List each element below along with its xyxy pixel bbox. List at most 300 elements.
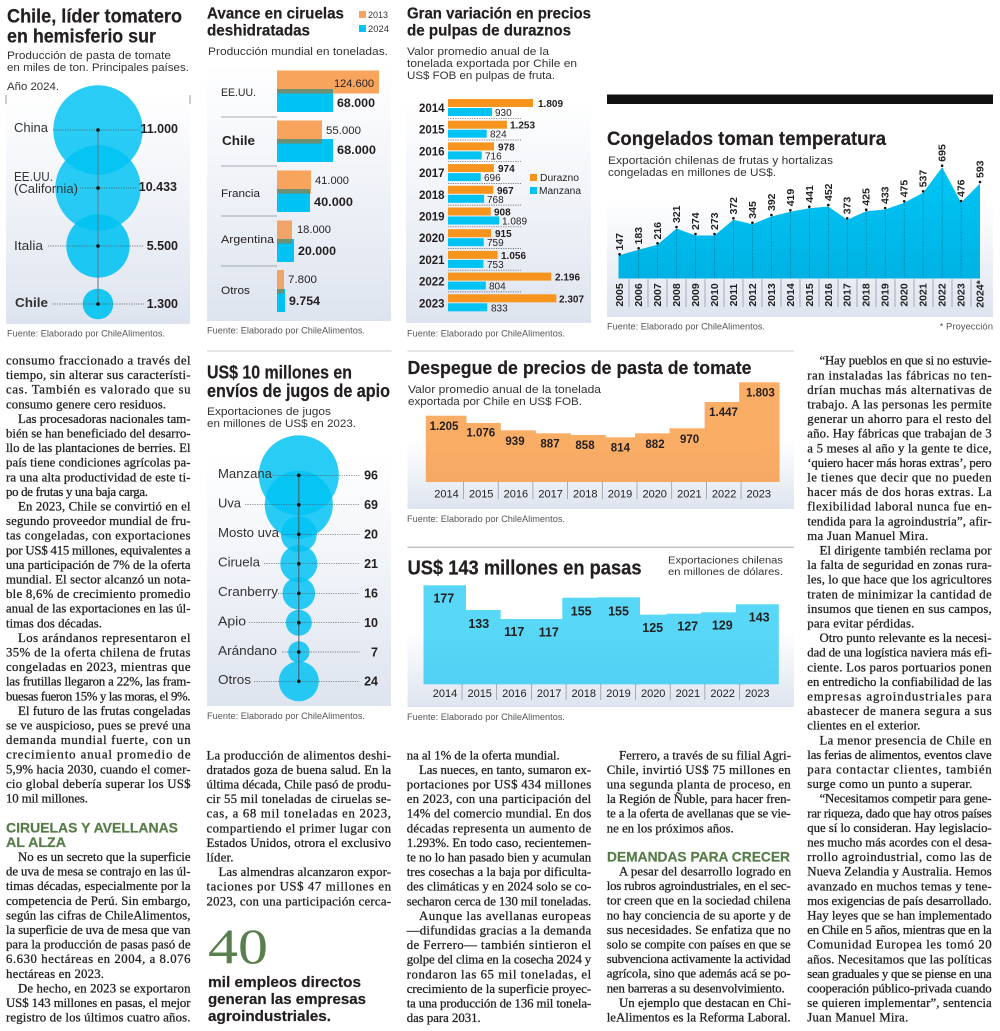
- bar chart: 939: [505, 436, 525, 448]
- bubble chart: Manzana: [218, 467, 272, 481]
- year axis: 2014: [785, 283, 797, 307]
- article column 3: das para 2031.: [407, 1011, 481, 1025]
- title: Avance en ciruelas: [207, 6, 344, 22]
- article column 5: en entredicho la confiabilidad de las: [807, 675, 992, 689]
- subtitle: US$ FOB en pulpas de fruta.: [407, 70, 555, 82]
- article column 1 bottom: de uva de mesa se contrajo en las úl-: [6, 865, 190, 879]
- article column 1 top: Los arándanos representaron el: [18, 631, 191, 645]
- article column 2: líder.: [206, 850, 234, 864]
- bubble chart: Chile: [15, 296, 48, 310]
- article column 5: años. Necesitamos que las políticas: [807, 952, 992, 966]
- bar chart: 2023: [419, 298, 445, 310]
- title: Gran variación en precios: [407, 6, 591, 22]
- header bar: [607, 94, 993, 104]
- article column 5: sean graduales y que se piense en una: [807, 967, 992, 981]
- article column 5: empresas agroindustriales para: [807, 690, 992, 704]
- bubble chart: 11.000: [140, 122, 178, 136]
- bubble chart: 10.433: [139, 180, 177, 194]
- subtitle: en millones de dólares.: [668, 567, 783, 578]
- legend: Durazno: [540, 173, 579, 184]
- article column 3: tres cosechas a la baja por dificulta-: [407, 865, 591, 879]
- article column 2: Estados Unidos, otrora el exclusivo: [206, 836, 391, 850]
- bubble chart: 5.500: [147, 239, 178, 253]
- area chart: 537: [918, 170, 930, 187]
- bar chart: 117: [539, 626, 559, 640]
- year axis: 2016: [823, 283, 835, 307]
- article column 1 top: una participación de 7% de la oferta: [6, 558, 191, 572]
- year axis: 2013: [766, 283, 778, 307]
- subtitle: [207, 406, 356, 430]
- bar chart: 858: [575, 440, 595, 452]
- bar chart: 1.089: [502, 216, 527, 228]
- article column 5: tendida para la agroindustria”, afir-: [807, 514, 992, 528]
- article column 1 top: El futuro de las frutas congeladas: [18, 704, 191, 718]
- bar chart: 753: [487, 260, 504, 271]
- article column 5: las ferias de alimentos, eventos clave: [807, 748, 992, 762]
- article column 4 top: te a la oferta de avellanas que se vie-: [607, 807, 791, 821]
- bubble chart: 20: [364, 528, 378, 542]
- year axis: 2011: [728, 283, 740, 306]
- bar chart: 127: [677, 620, 698, 634]
- year axis: [614, 279, 986, 308]
- bar chart: 2016: [504, 488, 528, 500]
- title: [207, 6, 344, 40]
- panel background: [408, 630, 794, 707]
- title: US$ 143 millones en pasas: [408, 558, 642, 580]
- article column 4 top: [607, 748, 791, 835]
- article column 1 top: crecimiento anual promedio de: [6, 748, 191, 762]
- area chart: 476: [956, 179, 968, 197]
- article column 2: dratados goza de buena salud. En la: [206, 763, 391, 777]
- article column 1 top: consumo fraccionado a través del: [6, 354, 191, 368]
- bar chart: 2014: [433, 688, 457, 700]
- bar chart: 915: [495, 229, 512, 240]
- article column 1 bottom: para la producción de pasas pasó de: [6, 938, 191, 952]
- bar chart: 55.000: [326, 125, 361, 137]
- bar chart: 1.205: [430, 421, 459, 433]
- bubble chart: 24: [364, 674, 378, 688]
- year axis: 2012: [747, 283, 759, 307]
- article column 5: ciente. Los paros portuarios ponen: [807, 660, 992, 674]
- bar chart: 68.000: [337, 98, 375, 110]
- bar chart: 908: [494, 208, 511, 218]
- subtitle: en miles de ton. Principales países.: [7, 62, 189, 74]
- article column 1 bottom: No es un secreto que la superficie: [18, 850, 191, 864]
- subtitle: [408, 384, 602, 408]
- article column 1 bottom: registro de los últimos cuatro años.: [6, 1011, 190, 1025]
- area chart: 419: [785, 189, 797, 206]
- area chart: 433: [880, 186, 892, 204]
- article column 5: nes mucho más acordes con el desa-: [807, 836, 992, 850]
- panel background: [207, 455, 391, 706]
- bar chart: 1.447: [709, 407, 738, 419]
- article column 5: rrollo agroindustrial, como las de: [807, 850, 992, 864]
- article column 5: a 5 meses al año y la gente te dice,: [807, 441, 992, 455]
- bar chart: 125: [642, 621, 663, 635]
- article column 4 bottom: A pesar del desarrollo logrado en: [619, 864, 792, 878]
- bar chart: 155: [571, 604, 592, 618]
- bubble chart: (California): [14, 182, 78, 196]
- panel: raisins: [407, 556, 794, 723]
- bar chart: 1.056: [501, 251, 526, 262]
- article column 1 bottom: 6.630 hectáreas en 2004, a 8.076: [6, 952, 191, 966]
- bar chart: 2022: [710, 688, 735, 700]
- article column 5: Hay leyes que se han implementado: [807, 908, 992, 922]
- article column 5: hacer más de dos horas extras. La: [807, 485, 992, 499]
- bar chart: [419, 99, 584, 314]
- bar chart: 2023: [747, 488, 771, 500]
- title: [7, 6, 182, 48]
- article column 4 bottom: solo se compite con países en que se: [607, 938, 791, 952]
- bar chart: 20.000: [298, 246, 336, 258]
- source note: Fuente: Elaborado por ChileAlimentos.: [407, 514, 565, 525]
- article column 1 top: buesas fueron 15% y las moras, el 9%.: [6, 689, 190, 703]
- article column 2: 2023, con una participación cerca-: [206, 894, 391, 908]
- article column 4 top: Chile, invirtió US$ 75 millones en: [607, 763, 791, 777]
- title: de pulpas de duraznos: [407, 22, 571, 40]
- title: envíos de jugos de apio: [207, 381, 390, 401]
- article column 2: compartiendo el primer lugar con: [206, 821, 392, 835]
- title: Chile, líder tomatero: [7, 6, 182, 28]
- article column 1 top: ra una alta productividad de este ti-: [6, 470, 190, 484]
- article column 4 bottom: sus necesidades. Se enfatiza que no: [607, 923, 791, 937]
- subtitle: Valor promedio anual de la tonelada: [408, 384, 602, 396]
- bar chart: 7.800: [288, 274, 317, 286]
- article column 5: “Necesitamos competir para gene-: [820, 792, 992, 806]
- bar chart: 2017: [538, 488, 563, 500]
- article column 1 top: En 2023, Chile se convirtió en el: [18, 500, 191, 514]
- year axis: 2010: [709, 283, 721, 307]
- bar chart: 970: [680, 434, 699, 446]
- article column 5: surge como un punto a superar.: [807, 777, 972, 791]
- article column 2: cas, a 68 mil toneladas en 2023,: [206, 807, 391, 821]
- article column 1 top: Las procesadoras nacionales tam-: [18, 412, 190, 426]
- bar chart: 759: [487, 238, 504, 249]
- article column 3: décadas representa un aumento de: [407, 821, 592, 835]
- bar chart: 155: [608, 604, 629, 618]
- article column 3: ta una producción de 136 mil tonela-: [407, 996, 591, 1010]
- article column 1 top: se ve auspicioso, pues se prevé una: [6, 718, 191, 732]
- article column 4 top: ne en los próximos años.: [607, 821, 734, 835]
- bar chart: 41.000: [315, 175, 349, 187]
- article column 5: se quieren implementar”, sentencia: [807, 996, 992, 1010]
- panel: celery juice: [207, 362, 391, 722]
- article column 5: Comunidad Europea les tomó 20: [807, 938, 992, 952]
- subtitle: Producción de pasta de tomate: [7, 50, 171, 62]
- article column 5: cooperación público-privada cuando: [807, 982, 992, 996]
- article column 1 top: timas dos décadas.: [6, 616, 102, 630]
- area chart: 321: [671, 205, 683, 223]
- panel: tomato paste prices: [407, 357, 794, 525]
- subtitle: Exportación chilenas de frutas y hortalizas: [608, 155, 834, 167]
- article column 3: te no lo han pasado bien y acumulan: [407, 850, 592, 864]
- article column 2: Las almendras alcanzaron expor-: [218, 865, 391, 879]
- area chart: 373: [842, 197, 854, 214]
- year axis: 2008: [671, 283, 683, 307]
- bar chart: 143: [749, 610, 770, 624]
- bar chart: [424, 585, 779, 700]
- area chart: 593: [974, 160, 986, 178]
- bar chart: 1.809: [538, 99, 563, 110]
- year axis: 2005: [614, 283, 626, 307]
- title: Despegue de precios de pasta de tomate: [408, 357, 752, 378]
- article column 3: 1.293%. En todo caso, recientemen-: [407, 836, 591, 850]
- area chart: 274: [690, 212, 702, 230]
- legend: 2013: [368, 10, 388, 21]
- bubble chart: Cranberry: [218, 585, 279, 599]
- year axis: 2017: [842, 283, 854, 307]
- callout text: [208, 974, 366, 1025]
- section heading: demandas para crecer: DEMANDAS PARA CRECER: [607, 849, 790, 865]
- article column 1 bottom: competencia de Perú. Sin embargo,: [6, 894, 190, 908]
- year axis: 2007: [652, 283, 664, 307]
- article column 4 bottom: Un ejemplo que destacan en Chi-: [619, 996, 791, 1010]
- article column 4 bottom: [607, 864, 792, 1024]
- bar chart: 768: [487, 195, 504, 206]
- area chart: 392: [766, 193, 778, 211]
- subtitle: [7, 50, 189, 93]
- article column 5: [807, 354, 992, 1025]
- article column 1 top: ble 8,6% de crecimiento promedio: [6, 587, 190, 601]
- article column 1 top: 35% de la oferta chilena de frutas: [6, 646, 191, 660]
- bar chart: 882: [645, 439, 665, 451]
- article column 3: rondaron las 65 mil toneladas, el: [407, 967, 592, 981]
- bar chart: 177: [433, 592, 454, 606]
- article column 3: —difundidas gracias a la demanda: [406, 924, 592, 938]
- article column 1 top: 10 mil millones.: [6, 792, 88, 806]
- article column 4 bottom: los rubros agroindustriales, en el sec-: [607, 879, 791, 893]
- article column 5: para contactar clientes, también: [807, 762, 992, 776]
- bar chart: 1.076: [466, 428, 495, 440]
- bar chart: 2016: [502, 688, 527, 700]
- bubble chart: [14, 85, 178, 319]
- article column 5: clientes en el exterior.: [807, 719, 920, 733]
- article column 5: Otro punto relevante es la necesi-: [820, 631, 992, 645]
- subtitle: en millones de US$ en 2023.: [207, 418, 356, 430]
- bar chart: 2018: [573, 488, 598, 500]
- article column 4 bottom: nen barreras a su desenvolvimiento.: [607, 981, 785, 995]
- bar chart: 2021: [419, 255, 445, 267]
- article column 2: cir 55 mil toneladas de ciruelas se-: [206, 792, 391, 806]
- bar chart: 967: [497, 186, 514, 197]
- article column 3: Aunque las avellanas europeas: [419, 909, 591, 923]
- subtitle: exportada por Chile en US$ FOB.: [408, 396, 582, 408]
- article column 4 top: la Región de Ñuble, para hacer fren-: [607, 792, 791, 806]
- article column 3: des climáticas y en 2024 solo se co-: [407, 880, 591, 894]
- area chart: 273: [709, 212, 721, 230]
- year axis: 2023: [956, 283, 968, 307]
- callout text: mil empleos directos: [208, 974, 361, 991]
- bar chart: 2017: [537, 688, 561, 700]
- area chart: 372: [728, 197, 740, 214]
- article column 4 bottom: subvenciona activamente la actividad: [607, 952, 791, 966]
- article column 5: en Chile en 5 años, mientras que en la: [807, 923, 992, 937]
- area chart: 345: [747, 201, 759, 219]
- source note: Fuente: Elaborado por ChileAlimentos.: [407, 712, 565, 723]
- panel background: [406, 100, 591, 323]
- article column 1 bottom: US$ 143 millones en pasas, el mejor: [6, 996, 191, 1010]
- bar chart: 2021: [676, 688, 700, 700]
- article column 5: que sí lo consideran. Hay legislacio-: [807, 821, 992, 835]
- year axis: 2018: [861, 283, 873, 307]
- subtitle: Producción mundial en toneladas.: [208, 46, 388, 58]
- bar chart: 2022: [712, 488, 736, 500]
- subtitle: [668, 556, 783, 578]
- legend: [359, 10, 389, 35]
- article column 3: [406, 748, 592, 1025]
- bar chart: 930: [495, 108, 512, 119]
- article column 1 top: demanda mundial fuerte, con un: [6, 733, 191, 747]
- article column 5: generar un ahorro para el resto del: [807, 412, 992, 426]
- article column 3: Las nueces, en tanto, sumaron ex-: [419, 763, 591, 777]
- bar chart: [426, 382, 780, 500]
- title: Congelados toman temperatura: [607, 129, 886, 150]
- article column 5: La menor presencia de Chile en: [820, 733, 992, 747]
- article column 5: le tienes que decir que no pueden: [807, 470, 992, 484]
- bubble chart: 21: [364, 557, 378, 571]
- article column 2: taciones por US$ 47 millones en: [206, 880, 392, 894]
- bar chart: 814: [611, 442, 631, 454]
- bar chart: 2019: [606, 688, 631, 700]
- panel: peach pulp: [406, 6, 591, 340]
- bar chart: 2020: [641, 688, 665, 700]
- bar chart: Argentina: [221, 234, 275, 246]
- source note: Fuente: Elaborado por ChileAlimentos.: [207, 326, 365, 336]
- article column 1 top: por US$ 415 millones, equivalentes a: [6, 543, 191, 557]
- year axis: 2006: [633, 283, 645, 307]
- panel: dried plums: [207, 6, 391, 336]
- bubble chart: Uva: [218, 496, 241, 510]
- bar chart: 1.253: [510, 121, 535, 132]
- article column 3: secharon cerca de 130 mil toneladas.: [407, 894, 591, 908]
- panel: tomato leaders: [6, 6, 190, 340]
- bar chart: Chile: [222, 133, 255, 148]
- article column 1 top: bién se han beneficiado del desarro-: [6, 426, 190, 440]
- area chart: [614, 144, 986, 278]
- article column 3: en 2023, con una participación del: [407, 792, 592, 806]
- bar chart: 2020: [419, 233, 445, 245]
- area chart: 147: [614, 233, 626, 250]
- article column 1 top: cas. También es valorado que su: [6, 383, 191, 397]
- year axis: 2022: [937, 283, 949, 307]
- callout text: generan las empresas: [208, 991, 366, 1008]
- bar chart: 2020: [642, 488, 667, 500]
- article column 5: para evitar pérdidas.: [807, 616, 914, 630]
- bar chart: 978: [498, 142, 515, 153]
- area chart: 425: [861, 188, 873, 206]
- article column 5: rar riqueza, dado que hay otros países: [807, 806, 992, 820]
- subtitle: Año 2024.: [7, 81, 59, 93]
- subtitle: [407, 46, 577, 82]
- bar chart: 887: [540, 438, 560, 450]
- source note: Fuente: Elaborado por ChileAlimentos.: [407, 328, 565, 340]
- bubble chart: 69: [364, 498, 378, 512]
- bubble chart: 96: [364, 468, 378, 482]
- bar chart: 2015: [419, 125, 445, 137]
- subtitle: Exportaciones de jugos: [207, 406, 332, 418]
- bar chart: 2015: [467, 688, 492, 700]
- panel background: [607, 200, 993, 317]
- article column 4 top: Ferrero, a través de su filial Agri-: [619, 748, 791, 762]
- section heading: ciruelas y avellanas: [6, 820, 178, 850]
- area chart: 475: [899, 180, 911, 197]
- article column 5: dad de una logística naviera más efi-: [807, 646, 992, 660]
- bubble chart: 7: [371, 646, 378, 660]
- article column 4 bottom: tor creen que en la sociedad chilena: [607, 894, 791, 908]
- area chart: 183: [633, 227, 645, 244]
- article column 4 bottom: no hay conciencia de su aporte y de: [607, 908, 791, 922]
- article column 5: mos exigencias de país desarrollado.: [807, 894, 992, 908]
- bar chart: 9.754: [289, 296, 321, 308]
- article column 1 top: tas congeladas, con exportaciones: [6, 529, 191, 543]
- article column 5: la falta de seguridad en zonas rura-: [807, 558, 992, 572]
- bar chart: 124.600: [334, 78, 374, 90]
- subtitle: [608, 155, 834, 179]
- area chart: 695: [937, 144, 949, 162]
- legend: 2024: [368, 24, 389, 35]
- article column 1 top: país tiene condiciones agrícolas pa-: [6, 456, 190, 470]
- panel background: [408, 440, 794, 509]
- article column 3: portaciones por US$ 434 millones: [407, 778, 591, 792]
- bar chart: 804: [489, 282, 506, 293]
- area chart: 452: [823, 183, 835, 201]
- section heading: ciruelas y avellanas: CIRUELAS Y AVELLANAS: [6, 820, 178, 836]
- bar chart: 40.000: [314, 197, 353, 209]
- bar chart: 2.307: [559, 294, 584, 305]
- article column 1 bottom: De hecho, en 2023 se exportaron: [18, 981, 191, 995]
- bar chart: 117: [504, 625, 524, 639]
- article column 5: ran instaladas las fábricas no ten-: [807, 368, 992, 382]
- article column 1 bottom: timas décadas, especialmente por la: [6, 879, 191, 893]
- article column 4 bottom: agrícola, sino que además acá se po-: [607, 967, 791, 981]
- article column 1 bottom: [6, 850, 191, 1025]
- bubble chart: Italia: [14, 239, 43, 253]
- article column 1 top: anual de las exportaciones en las úl-: [6, 602, 190, 616]
- article column 5: les, lo que hace que los agricultores: [807, 573, 992, 587]
- bar chart: 2018: [572, 688, 596, 700]
- article column 2: última década, Chile pasó de produ-: [206, 778, 391, 792]
- article column 4 bottom: leAlimentos es la Reforma Laboral.: [607, 1010, 791, 1024]
- article column 3: crecimiento de la superficie proyec-: [407, 982, 591, 996]
- bar chart: [221, 70, 379, 312]
- article column 1 top: las frutillas llegaron a 22%, las fram-: [6, 675, 190, 689]
- bubble chart: 10: [364, 616, 378, 630]
- bar chart: 129: [712, 618, 733, 632]
- area chart: 441: [804, 185, 816, 203]
- panel: frozen exports: [607, 129, 993, 332]
- article column 5: drían muchas más alternativas de: [807, 383, 992, 397]
- article column 3: de Ferrero— también sintieron el: [407, 938, 592, 952]
- callout: 40 thousand jobs: [208, 918, 366, 1025]
- title: deshidratadas: [207, 22, 310, 40]
- article column 5: El dirigente también reclama por: [820, 544, 992, 558]
- article column 5: año. Hay fábricas que trabajan de 3: [807, 427, 992, 441]
- source note: Fuente: Elaborado por ChileAlimentos.: [607, 322, 765, 332]
- bar chart: 2016: [419, 146, 445, 158]
- bar chart: 2.196: [555, 273, 580, 284]
- bar chart: 696: [484, 173, 501, 184]
- bar chart: 2023: [745, 688, 770, 700]
- article column 1 top: [6, 354, 191, 806]
- projection note: * Proyección: [940, 322, 993, 332]
- bubble chart: Ciruela: [218, 556, 260, 570]
- bubble chart: China: [14, 121, 48, 135]
- article column 5: avanzado en muchos temas y tene-: [807, 879, 992, 893]
- bar chart: 2019: [419, 212, 445, 224]
- title: [407, 6, 591, 40]
- article column 3: golpe del clima en la cosecha 2024 y: [407, 953, 592, 967]
- article column 1 top: congeladas en 2023, mientras que: [6, 660, 191, 674]
